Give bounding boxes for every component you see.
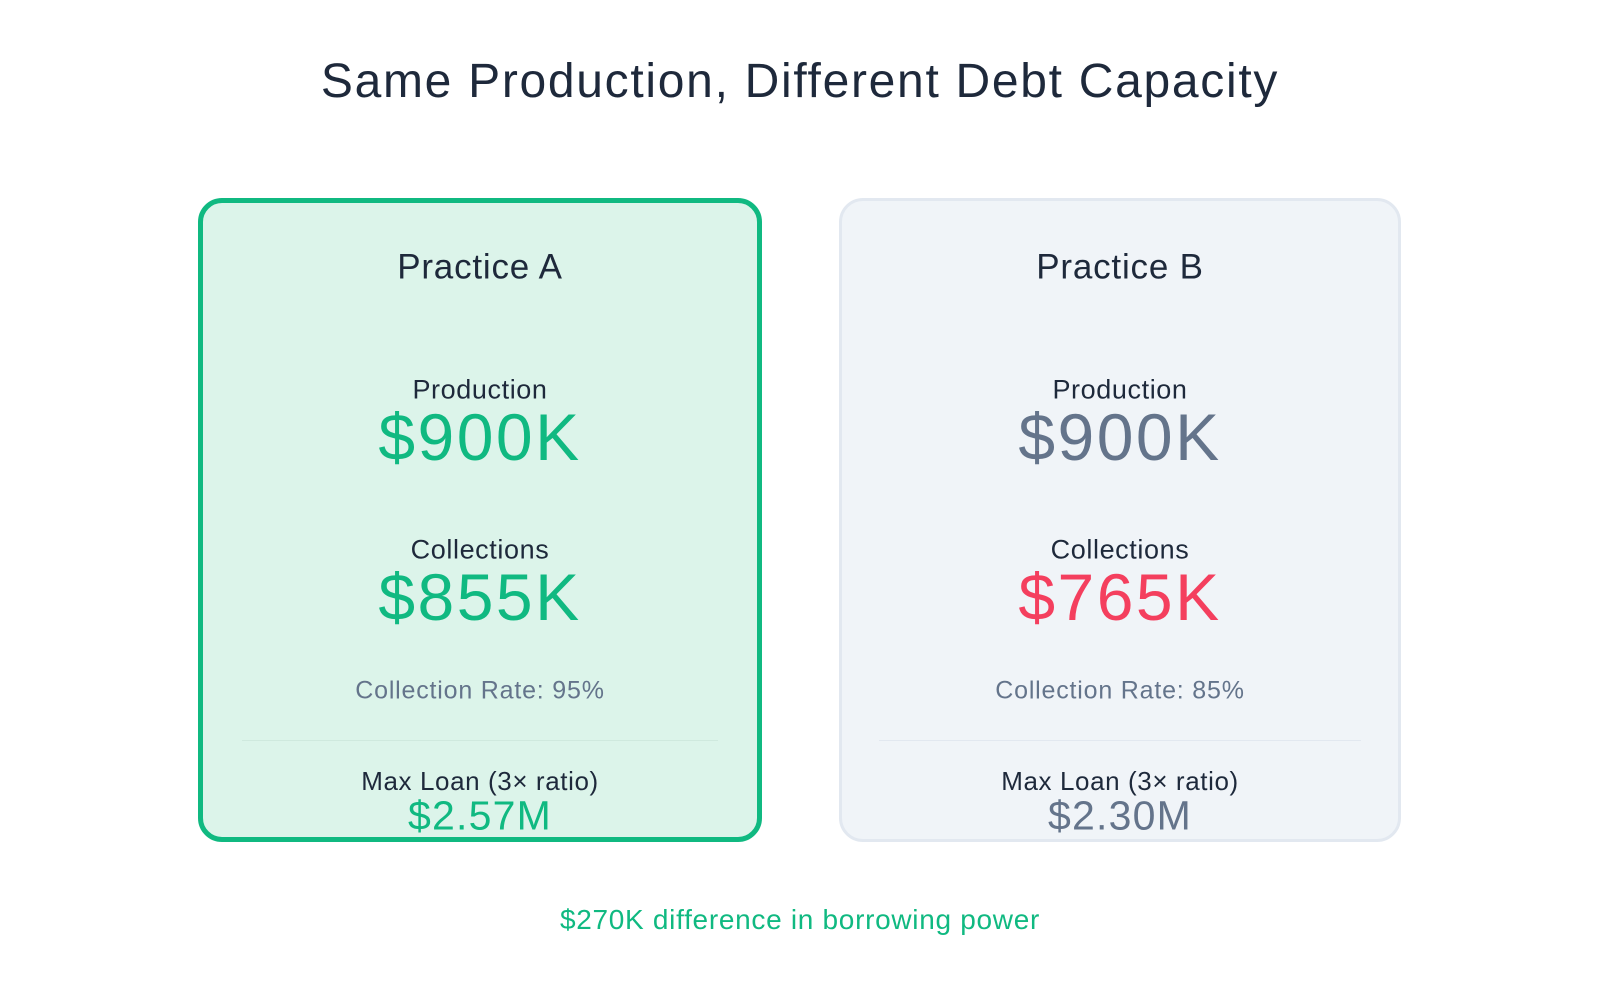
collections label B: Collections (1051, 534, 1189, 564)
production value A: $900K (378, 400, 582, 474)
max loan label B: Max Loan (3× ratio) (1001, 766, 1239, 796)
collections value B: $765K (1018, 560, 1222, 634)
production label B: Production (1052, 374, 1188, 404)
heading: practice A: Practice A (397, 248, 563, 286)
collections label A: Collections (411, 534, 549, 564)
title: Same Production, Different Debt Capacity (321, 55, 1279, 108)
panel: practice B (839, 198, 1401, 842)
max loan value A: $2.57M (408, 792, 552, 838)
collections value A: $855K (378, 560, 582, 634)
collection rate A: Collection Rate: 95% (355, 676, 605, 704)
panel: practice A (198, 198, 762, 842)
heading: practice B: Practice B (1036, 248, 1204, 286)
max loan value B: $2.30M (1048, 792, 1192, 838)
collection rate B: Collection Rate: 85% (995, 676, 1245, 704)
production label A: Production (412, 374, 548, 404)
production value B: $900K (1018, 400, 1222, 474)
footer callout: $270K difference in borrowing power (560, 904, 1040, 935)
max loan label A: Max Loan (3× ratio) (361, 766, 599, 796)
